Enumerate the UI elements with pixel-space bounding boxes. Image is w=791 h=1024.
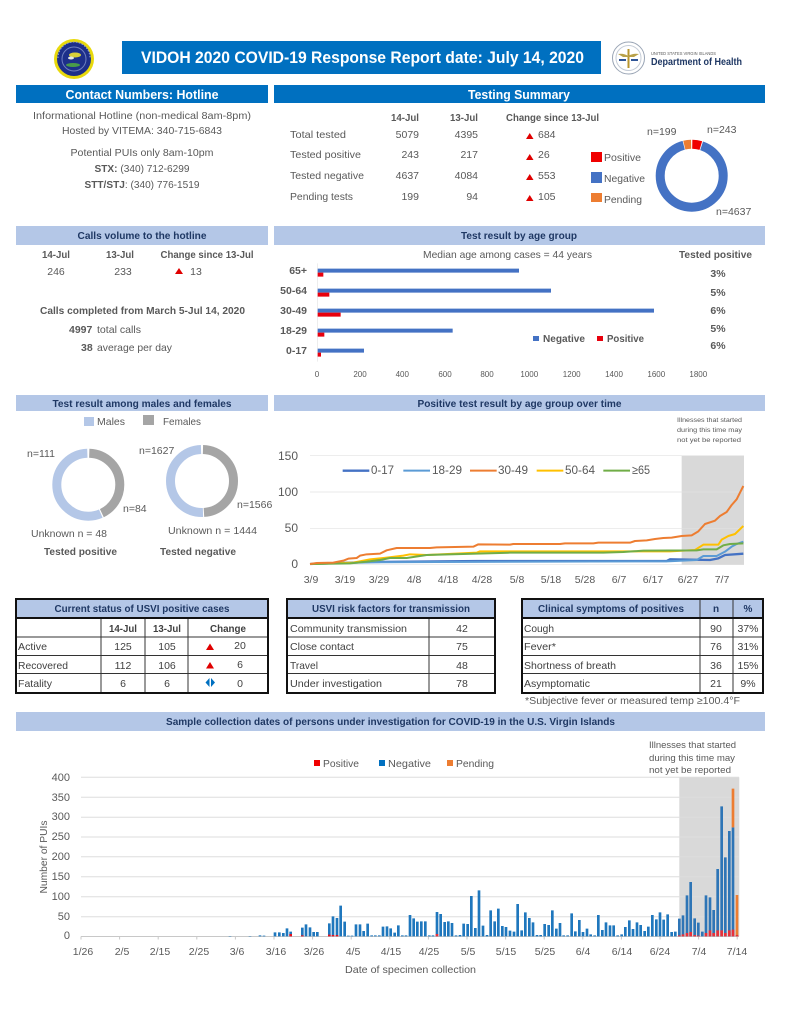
panel: calls volume to the hotline: 13	[190, 266, 202, 278]
icon: Department of Health logo: Department of Health	[651, 57, 742, 68]
panel: test result by age group	[274, 226, 765, 379]
chart: cumulative positives line chart	[278, 449, 744, 586]
tested positive percentages	[710, 268, 726, 352]
table: clinical symptoms of positives: Clinical symptoms of positives	[538, 604, 684, 615]
table: current status of USVI positive cases: Active	[18, 641, 47, 653]
chart: sample collection stacked bars: 5/5	[461, 946, 475, 958]
chart: age group horizontal bars: 1400	[605, 370, 623, 379]
panel: testing summary: 553	[538, 170, 556, 182]
table: current status of USVI positive cases: Change	[210, 623, 246, 635]
chart: sample collection stacked bars: 3/6	[230, 946, 244, 958]
chart: cumulative positives line chart: 4/18	[438, 574, 458, 586]
table: current status of USVI positive cases: 106	[158, 660, 176, 672]
panel: test result among males and females	[16, 395, 272, 558]
table: current status of USVI positive cases: 20	[234, 640, 246, 652]
chart: testing donut: n=243	[707, 124, 737, 136]
panel: contact numbers hotline: Informational Hotline (non-medical 8am-8pm)	[33, 110, 251, 122]
tested positive percentages: 5%	[710, 323, 726, 335]
panel: test result by age group: Test result by age group	[461, 231, 577, 242]
table: USVI risk factors for transmission: Close contact	[290, 641, 354, 653]
chart: cumulative positives line chart: 50-64	[565, 463, 595, 477]
table: clinical symptoms of positives: Fever*	[524, 641, 556, 653]
chart: cumulative positives line chart: 6/7	[612, 574, 626, 586]
tested positive percentages: 5%	[710, 287, 726, 299]
panel: test result among males and females: Males	[97, 416, 125, 428]
chart: sample collection stacked bars: 7/14	[727, 946, 747, 958]
table: USVI risk factors for transmission: USVI risk factors for transmission	[312, 604, 470, 615]
legend: testing summary: Positive	[604, 152, 641, 164]
legend: sample collection chart: Positive	[323, 758, 359, 770]
panel: calls volume to the hotline: 233	[114, 266, 132, 278]
panel: contact numbers hotline	[16, 85, 268, 191]
chart: sample collection stacked bars: 400	[52, 772, 70, 784]
legend: sample collection chart	[314, 758, 494, 770]
table: USVI risk factors for transmission: 75	[456, 641, 468, 653]
panel: testing summary: 94	[466, 191, 478, 203]
chart: tested negative donut: Unknown n = 1444	[168, 525, 257, 537]
note: reporting delay: not yet be reported	[649, 765, 731, 776]
table: clinical symptoms of positives: 9%	[740, 678, 756, 690]
panel: contact numbers hotline: Contact Numbers: Hotline	[66, 87, 218, 102]
table: current status of USVI positive cases: 6	[237, 659, 243, 671]
note: reporting delay	[649, 740, 736, 776]
table: current status of USVI positive cases: Recovered	[18, 660, 68, 672]
legend: testing summary: Pending	[604, 194, 642, 206]
panel: testing summary: Pending tests	[290, 191, 353, 203]
chart: sample collection stacked bars: 3/16	[266, 946, 286, 958]
chart: sample collection stacked bars: 350	[52, 792, 70, 804]
table: USVI risk factors for transmission: 42	[456, 623, 468, 635]
table: clinical symptoms of positives: 15%	[737, 660, 759, 672]
chart: age group horizontal bars: 1000	[520, 370, 539, 379]
panel: testing summary: 243	[401, 149, 419, 161]
panel: testing summary: 684	[538, 129, 556, 141]
table: clinical symptoms of positives: 90	[710, 623, 722, 635]
chart: testing donut: n=4637	[716, 206, 751, 218]
icon: no change diamond	[206, 678, 215, 687]
chart: cumulative positives line chart: 100	[278, 485, 298, 499]
chart: age group horizontal bars: 0	[315, 370, 320, 379]
panel: test result by age group: Median age among cases = 44 years	[423, 249, 592, 261]
table: USVI risk factors for transmission	[287, 599, 495, 693]
table: clinical symptoms of positives: 31%	[737, 641, 759, 653]
table: USVI risk factors for transmission: 48	[456, 660, 468, 672]
chart: age group horizontal bars: 1800	[689, 370, 708, 379]
chart: sample collection stacked bars: 0	[64, 930, 70, 942]
panel: testing summary: 26	[538, 149, 550, 161]
panel: testing summary: 14-Jul	[391, 112, 419, 124]
table: current status of USVI positive cases: Current status of USVI positive cases	[54, 604, 230, 615]
chart: sample collection stacked bars	[38, 772, 747, 976]
table: clinical symptoms of positives: Asymptomatic	[524, 678, 590, 690]
panel: testing summary: Change since 13-Jul	[506, 112, 599, 124]
chart: sample collection stacked bars: Number of PUIs	[38, 820, 50, 894]
legend: age group bars: Positive	[607, 333, 644, 345]
chart: cumulative positives line chart: 0	[291, 557, 298, 571]
panel: calls volume to the hotline: Calls completed from March 5-Jul 14, 2020	[40, 305, 245, 317]
table: clinical symptoms of positives: Cough	[524, 623, 554, 635]
panel: calls volume to the hotline: Calls volume to the hotline	[78, 231, 207, 242]
chart: sample collection stacked bars: 300	[52, 811, 70, 823]
panel: testing summary: Tested positive	[290, 149, 361, 161]
chart: sample collection stacked bars: 3/26	[304, 946, 324, 958]
chart: sample collection stacked bars: 4/25	[419, 946, 439, 958]
panel: testing summary: Testing Summary	[468, 87, 571, 102]
panel: testing summary: Tested negative	[290, 170, 364, 182]
note: reporting delay: Illnesses that started	[677, 417, 742, 424]
chart: sample collection stacked bars: 2/15	[150, 946, 170, 958]
panel: calls volume to the hotline: 246	[47, 266, 65, 278]
chart: age group horizontal bars: 50-64	[280, 285, 307, 297]
legend: testing summary: Negative	[604, 173, 645, 185]
chart: sample collection stacked bars: 6/14	[612, 946, 632, 958]
chart: cumulative positives line chart: 3/19	[335, 574, 355, 586]
chart: age group horizontal bars: 30-49	[280, 305, 307, 317]
chart: cumulative positives line chart: ≥65	[632, 463, 650, 477]
note: reporting delay: during this time may	[649, 753, 735, 764]
chart: cumulative positives line chart: 150	[278, 449, 298, 463]
chart: tested positive donut	[27, 448, 147, 558]
panel: positive test result by age group over time: Positive test result by age group over time	[418, 399, 622, 410]
panel: calls volume to the hotline	[16, 226, 268, 354]
table: current status of USVI positive cases: 112	[115, 660, 132, 672]
chart: testing donut	[647, 124, 751, 218]
panel: testing summary: 217	[460, 149, 478, 161]
panel: calls volume to the hotline: average per day	[97, 342, 173, 354]
chart: cumulative positives line chart: 30-49	[498, 463, 528, 477]
panel: testing summary: 4084	[455, 170, 478, 182]
chart: tested positive donut: Unknown n = 48	[31, 528, 107, 540]
panel: contact numbers hotline: Hosted by VITEMA: 340-715-6843	[62, 125, 222, 137]
table: current status of USVI positive cases: 6	[164, 678, 170, 690]
chart: cumulative positives line chart: 5/8	[510, 574, 524, 586]
title: VIDOH 2020 COVID-19 Response Report date: July 14, 2020	[141, 48, 584, 67]
panel: testing summary: 5079	[396, 129, 419, 141]
chart: sample collection stacked bars: 5/25	[535, 946, 555, 958]
chart: cumulative positives line chart: 5/18	[541, 574, 561, 586]
table: USVI risk factors for transmission: Under investigation	[290, 678, 382, 690]
chart: age group horizontal bars: 18-29	[280, 325, 307, 337]
chart: cumulative positives line chart: 7/7	[715, 574, 729, 586]
panel: positive test result by age group over time	[274, 395, 765, 586]
panel: test result among males and females: Females	[163, 416, 201, 428]
note: reporting delay: Illnesses that started	[649, 740, 736, 751]
chart: sample collection stacked bars: 6/24	[650, 946, 670, 958]
chart: tested negative donut	[139, 445, 272, 558]
panel: contact numbers hotline: STX: (340) 712-6299	[94, 163, 190, 175]
table: current status of USVI positive cases	[16, 599, 268, 693]
note: reporting delay	[677, 417, 743, 444]
chart: age group horizontal bars: 200	[353, 370, 367, 379]
legend: sample collection chart: Pending	[456, 758, 494, 770]
chart: age group horizontal bars: 800	[480, 370, 494, 379]
panel: calls volume to the hotline: 13-Jul	[106, 249, 134, 261]
chart: sample collection stacked bars: 150	[52, 871, 70, 883]
table: current status of USVI positive cases: 14-Jul	[109, 623, 137, 635]
legend: testing summary	[591, 152, 645, 206]
panel: contact numbers hotline: STT/STJ: (340) 776-1519	[84, 179, 200, 191]
chart: age group horizontal bars: 1600	[647, 370, 666, 379]
panel: sample collection dates: Sample collection dates of persons under investigation for COVID-19 in the U.S. Virgin Islands	[166, 717, 615, 728]
table: current status of USVI positive cases: Fatality	[18, 678, 53, 690]
chart: cumulative positives line chart: 3/29	[369, 574, 389, 586]
table: current status of USVI positive cases: 13-Jul	[153, 623, 181, 635]
icon: Department of Health logo: UNITED STATES VIRGIN ISLANDS	[651, 51, 716, 56]
chart: tested negative donut: n=1627	[139, 445, 174, 457]
panel: calls volume to the hotline: Change since 13-Jul	[160, 249, 254, 261]
chart: age group horizontal bars: 600	[438, 370, 452, 379]
chart: cumulative positives line chart: 50	[285, 521, 298, 535]
chart: sample collection stacked bars: 1/26	[73, 946, 93, 958]
panel: testing summary: 105	[538, 191, 556, 203]
chart: sample collection stacked bars: 7/4	[692, 946, 706, 958]
chart: age group horizontal bars: 0-17	[286, 345, 307, 357]
panel: testing summary: 4637	[396, 170, 419, 182]
chart: sample collection stacked bars: 4/5	[346, 946, 360, 958]
chart: age group horizontal bars	[280, 263, 708, 379]
chart: age group horizontal bars: 1200	[563, 370, 581, 379]
panel: test result by age group: Tested positive	[679, 249, 752, 261]
panel: calls volume to the hotline: 14-Jul	[42, 249, 70, 261]
note: reporting delay: during this time may	[677, 427, 743, 434]
chart: sample collection stacked bars: 100	[52, 891, 70, 903]
table: clinical symptoms of positives: 37%	[737, 623, 759, 635]
chart: testing donut: n=199	[647, 126, 677, 138]
table: current status of USVI positive cases: 125	[114, 641, 132, 653]
panel: sample collection dates	[16, 712, 765, 976]
chart: tested negative donut: n=1566	[237, 499, 272, 511]
chart: cumulative positives line chart: 18-29	[432, 463, 462, 477]
table: clinical symptoms of positives: %	[744, 604, 753, 615]
chart: cumulative positives line chart: 5/28	[575, 574, 595, 586]
footnote: fever definition: *Subjective fever or measured temp ≥100.4°F	[525, 695, 740, 707]
table: current status of USVI positive cases: 0	[237, 678, 243, 690]
note: reporting delay: not yet be reported	[677, 437, 741, 444]
chart: tested positive donut: n=111	[27, 448, 55, 460]
chart: sample collection stacked bars: Date of specimen collection	[345, 964, 476, 976]
chart: sample collection stacked bars: 2/25	[189, 946, 209, 958]
legend: sample collection chart: Negative	[388, 758, 431, 770]
panel: testing summary: 13-Jul	[450, 112, 478, 124]
table: clinical symptoms of positives: 36	[710, 660, 722, 672]
table: USVI risk factors for transmission: Travel	[290, 660, 318, 672]
table: clinical symptoms of positives: Shortness of breath	[524, 660, 616, 672]
tested positive percentages: 6%	[710, 340, 726, 352]
chart: sample collection stacked bars: 200	[52, 851, 70, 863]
table: USVI risk factors for transmission: Community transmission	[290, 623, 407, 635]
table: USVI risk factors for transmission: 78	[456, 678, 468, 690]
panel: calls volume to the hotline: 4997	[69, 324, 93, 336]
chart: cumulative positives line chart: 0-17	[371, 463, 394, 477]
panel: testing summary	[274, 85, 765, 203]
chart: tested negative donut: Tested negative	[160, 546, 236, 558]
tested positive percentages: 3%	[710, 268, 726, 280]
chart: sample collection stacked bars: 5/15	[496, 946, 516, 958]
tested positive percentages: 6%	[710, 305, 726, 317]
table: clinical symptoms of positives: 21	[710, 678, 722, 690]
table: clinical symptoms of positives: 76	[710, 641, 722, 653]
icon: Department of Health logo	[612, 42, 742, 74]
table: clinical symptoms of positives	[522, 599, 763, 693]
panel: calls volume to the hotline: total calls	[97, 324, 141, 336]
panel: testing summary: Total tested	[290, 129, 346, 141]
chart: sample collection stacked bars: 250	[52, 831, 70, 843]
chart: cumulative positives line chart: 4/8	[407, 574, 421, 586]
chart: cumulative positives line chart: 4/28	[472, 574, 492, 586]
legend: age group bars: Negative	[543, 333, 585, 345]
chart: sample collection stacked bars: 50	[58, 911, 70, 923]
title	[122, 41, 601, 74]
chart: age group horizontal bars: 65+	[289, 265, 307, 277]
table: current status of USVI positive cases: 6	[120, 678, 126, 690]
table: current status of USVI positive cases: 105	[158, 641, 176, 653]
chart: age group horizontal bars: 400	[396, 370, 410, 379]
chart: cumulative positives line chart: 6/27	[678, 574, 698, 586]
icon: VIDOH seal logo	[54, 39, 94, 79]
panel: calls volume to the hotline: 38	[81, 342, 93, 354]
chart: sample collection stacked bars: 6/4	[576, 946, 590, 958]
panel: testing summary: 199	[401, 191, 419, 203]
panel: test result among males and females: Test result among males and females	[52, 399, 232, 410]
legend: age group bars	[533, 333, 644, 345]
chart: tested positive donut: n=84	[123, 503, 147, 515]
panel: testing summary: 4395	[455, 129, 478, 141]
chart: sample collection stacked bars: 4/15	[381, 946, 401, 958]
chart: sample collection stacked bars: 2/5	[115, 946, 129, 958]
chart: tested positive donut: Tested positive	[44, 546, 117, 558]
chart: cumulative positives line chart: 6/17	[643, 574, 663, 586]
table: clinical symptoms of positives: n	[713, 604, 719, 615]
panel: contact numbers hotline: Potential PUIs only 8am-10pm	[70, 147, 214, 159]
chart: cumulative positives line chart: 3/9	[304, 574, 318, 586]
